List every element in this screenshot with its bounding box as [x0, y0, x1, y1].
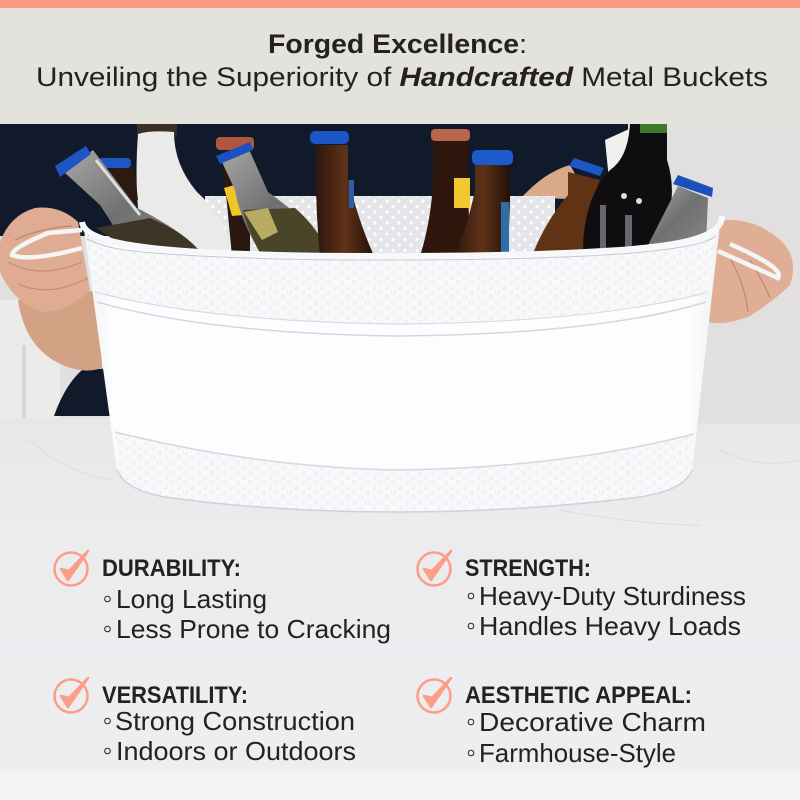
bottle: dark wine — [583, 124, 672, 256]
list: versatility: Strong Construction — [115, 706, 355, 736]
bottle: brown behind left — [98, 158, 138, 200]
bottle: dark brown centre — [310, 131, 374, 256]
list: strength: Heavy-Duty Sturdiness — [479, 581, 746, 611]
bottle: white — [137, 124, 232, 256]
handle: right — [718, 244, 779, 278]
heading: versatility: VERSATILITY: — [102, 682, 248, 709]
bottom strip — [0, 772, 800, 800]
panel: strength — [418, 551, 746, 641]
list: aesthetic appeal — [468, 707, 706, 768]
bottle: clear centre-left — [216, 142, 330, 256]
bottle: tilted clear left — [55, 146, 202, 254]
list: durability: Less Prone to Cracking — [116, 614, 391, 644]
photo: handles — [12, 230, 779, 278]
subtitle: Unveiling the Superiority of Handcrafted Metal Buckets — [36, 62, 768, 92]
heading: durability: DURABILITY: — [102, 555, 241, 582]
list: durability — [105, 584, 391, 644]
icon: check strength — [418, 551, 451, 586]
photo: arms and hands — [0, 208, 793, 371]
photo: background scene — [0, 124, 800, 424]
bottle: hidden yellow label — [216, 137, 254, 256]
bucket lower ridge — [95, 292, 708, 324]
list: aesthetic appeal: Farmhouse-Style — [479, 738, 676, 768]
top accent bar — [0, 0, 800, 8]
list: aesthetic appeal: Decorative Charm — [479, 707, 706, 737]
marble counter — [0, 418, 800, 772]
title: Forged Excellence: Forged Excellence : — [268, 29, 527, 59]
photo: bottles — [55, 124, 713, 256]
list: durability: Long Lasting — [116, 584, 267, 614]
icon: check aesthetic appeal — [418, 678, 451, 712]
bottle: amber tilted — [532, 158, 604, 256]
icon: check durability — [54, 551, 88, 586]
bucket rim — [82, 216, 722, 256]
bottle: blue cap amber — [454, 150, 513, 256]
heading: strength: STRENGTH: — [465, 555, 591, 582]
icon: check versatility — [54, 678, 88, 712]
list: strength: Handles Heavy Loads — [479, 611, 741, 641]
panel: durability — [54, 551, 391, 644]
handle: left — [12, 230, 82, 257]
list: strength — [468, 581, 746, 641]
bucket hammered bottom band — [115, 432, 694, 512]
bottle: red cap brown — [420, 129, 470, 256]
heading: aesthetic appeal: AESTHETIC APPEAL: — [465, 682, 692, 709]
list: versatility: Indoors or Outdoors — [116, 736, 356, 766]
bucket body — [84, 225, 720, 512]
title banner — [0, 8, 800, 124]
panel: aesthetic appeal — [418, 678, 706, 768]
bucket hammered top band — [86, 238, 716, 324]
panel: versatility — [54, 678, 356, 766]
photo: white bucket — [82, 216, 722, 512]
list: versatility — [105, 706, 356, 766]
photo: bucket back wall — [205, 196, 555, 256]
bottle: clear right — [645, 175, 713, 251]
